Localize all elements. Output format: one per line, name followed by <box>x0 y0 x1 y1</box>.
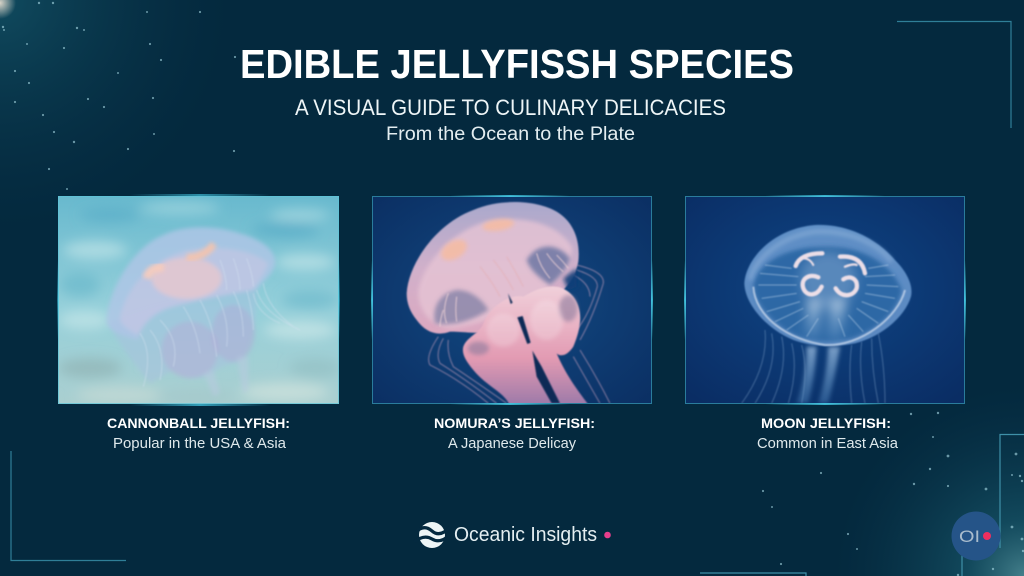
caption: cannonball jellyfish: Popular in the USA & Asia <box>113 436 287 452</box>
bell <box>744 225 912 346</box>
central stomach <box>800 252 857 340</box>
corner frame: bottom right <box>700 434 1024 576</box>
title: EDIBLE JELLYFISSH SPECIES <box>240 41 794 87</box>
caption: moon jellyfish: Common in East Asia <box>757 436 899 452</box>
pink dot <box>604 532 611 538</box>
bell <box>407 202 579 334</box>
panel: cannonball jellyfish photo <box>58 196 341 404</box>
brand name: Oceanic Insights <box>454 524 597 546</box>
radial lines <box>758 265 898 337</box>
tentacles <box>429 265 610 403</box>
caption: nomura's jellyfish: A Japanese Delicay <box>448 436 577 452</box>
tagline: From the Ocean to the Plate <box>386 124 635 145</box>
panel: moon jellyfish photo <box>685 196 965 404</box>
gonad rings <box>796 253 865 295</box>
panel: nomura's jellyfish photo <box>372 196 652 407</box>
caption: cannonball jellyfish <box>107 415 290 452</box>
caption: cannonball jellyfish: CANNONBALL JELLYFISH: <box>107 415 290 431</box>
corner badge <box>952 512 1000 560</box>
caption: nomura's jellyfish: NOMURA’S JELLYFISH: <box>434 415 595 431</box>
corner frame: top right <box>897 22 1011 128</box>
radial canals <box>440 253 568 327</box>
icon: waves <box>414 522 450 548</box>
caption: moon jellyfish <box>757 415 899 452</box>
panel edge highlights <box>57 194 966 406</box>
footer logo <box>414 522 611 548</box>
caption: moon jellyfish: MOON JELLYFISH: <box>761 415 891 431</box>
subtitle: A VISUAL GUIDE TO CULINARY DELICACIES <box>295 95 726 120</box>
corner frame: bottom left <box>11 451 126 560</box>
caption: nomura's jellyfish <box>434 415 595 452</box>
tentacles <box>742 330 885 403</box>
oral arms <box>463 287 590 407</box>
subumbrella windows <box>434 247 577 324</box>
body and oral arms <box>107 227 275 397</box>
corner badge: OI <box>959 527 980 546</box>
